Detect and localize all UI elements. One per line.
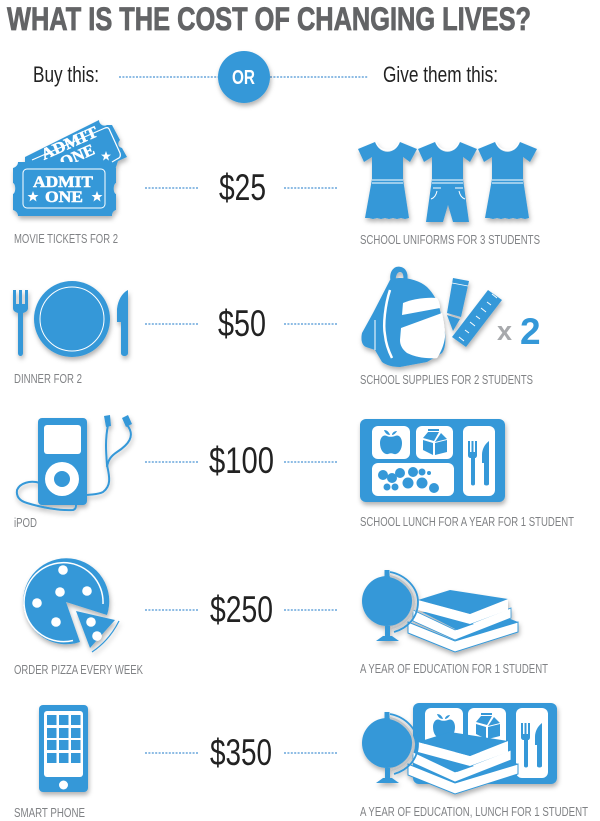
icon: pizza (23, 558, 119, 652)
uniform: dress (358, 142, 417, 219)
icon: education and lunch combined (362, 703, 557, 794)
icon: movie tickets: ONE (58, 141, 97, 172)
multiplier: x 2 (497, 311, 541, 352)
caption: smart phone: SMART PHONE (14, 805, 85, 820)
caption: school uniforms: SCHOOL UNIFORMS FOR 3 STUDENTS (360, 232, 540, 247)
icon: plate and cutlery (13, 281, 128, 357)
icon: movie tickets (13, 120, 127, 216)
uniform: dress (478, 142, 537, 219)
multiplier: x 2: x (497, 316, 512, 346)
tray food pieces (378, 467, 439, 493)
multiplier: x 2: 2 (520, 311, 541, 352)
icon: movie tickets: ONE (45, 189, 83, 206)
price: $250: $250 (210, 589, 273, 630)
uniform: shirt and shorts (418, 142, 477, 222)
icon: lunch tray (360, 419, 505, 502)
OR badge: OR (232, 67, 255, 89)
price: $50: $50 (218, 303, 266, 344)
icon: school uniforms (358, 142, 537, 222)
OR badge (218, 51, 270, 103)
icon: movie tickets: ADMIT (33, 174, 93, 191)
caption: pizza: ORDER PIZZA EVERY WEEK (14, 662, 143, 677)
price: $25: $25 (219, 167, 266, 208)
icon: school supplies (361, 267, 502, 367)
ruler (452, 290, 502, 347)
price: $100: $100 (209, 440, 274, 481)
heading: buy this: Buy this: (33, 62, 99, 87)
caption: movie tickets: MOVIE TICKETS FOR 2 (14, 231, 118, 246)
icon: globe and books (362, 570, 518, 652)
caption: iPod: iPOD (14, 515, 37, 530)
caption: dinner: DINNER FOR 2 (14, 371, 82, 386)
icon: movie tickets: ADMIT (39, 124, 101, 164)
heading: give them this: Give them this: (383, 62, 498, 87)
caption: school supplies: SCHOOL SUPPLIES FOR 2 STUDENTS (360, 372, 533, 387)
pencil (447, 278, 469, 331)
icon: iPod (17, 415, 132, 510)
backpack (361, 267, 445, 367)
icon: smart phone (39, 705, 88, 792)
price: $350: $350 (210, 732, 272, 773)
